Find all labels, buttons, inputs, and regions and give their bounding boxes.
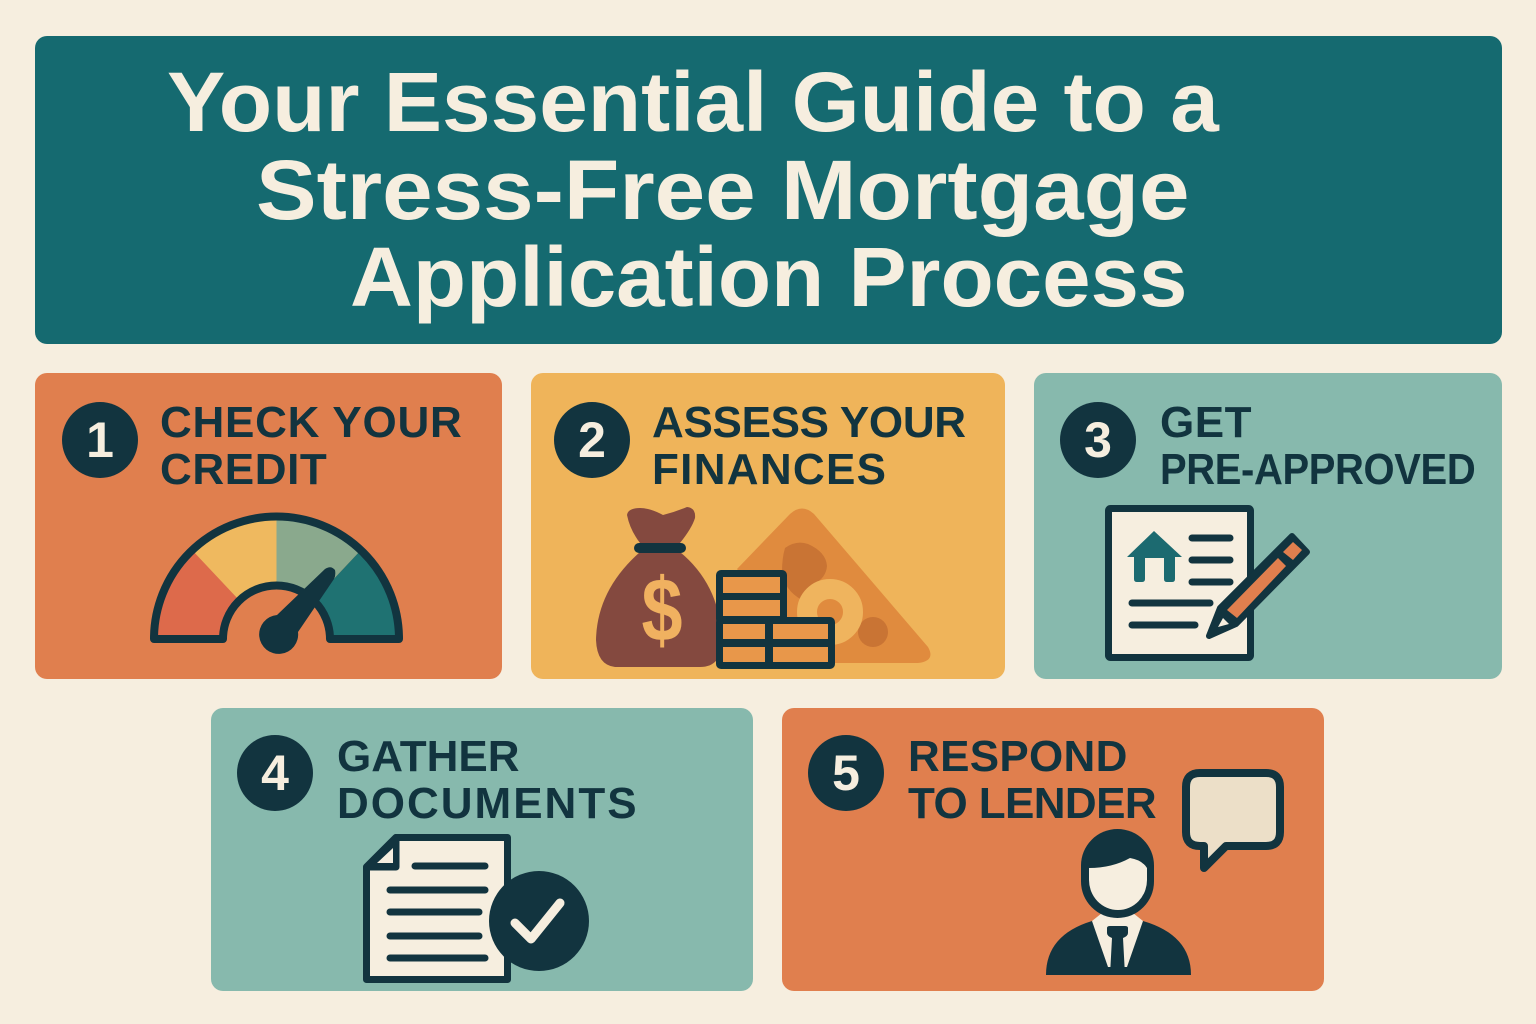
heading: get pre-approved: PRE-APPROVED bbox=[1160, 445, 1475, 494]
heading: assess your finances bbox=[652, 398, 966, 494]
step number 2 bbox=[554, 402, 630, 478]
heading: respond to lender: RESPOND bbox=[908, 732, 1128, 781]
icon: application form and pencil bbox=[1105, 505, 1310, 661]
step number 2: 2 bbox=[578, 412, 606, 468]
heading: respond to lender: TO LENDER bbox=[908, 779, 1156, 828]
heading: check your credit bbox=[160, 398, 463, 494]
panel: step 4 gather documents bbox=[211, 708, 753, 991]
heading: gather documents bbox=[337, 732, 639, 828]
heading: get pre-approved bbox=[1160, 398, 1475, 494]
heading: gather documents: DOCUMENTS bbox=[337, 779, 639, 828]
title banner bbox=[35, 36, 1502, 344]
step number 3 bbox=[1060, 402, 1136, 478]
heading: assess your finances: ASSESS YOUR bbox=[652, 398, 966, 447]
icon: credit score gauge bbox=[150, 512, 403, 654]
icon: lender in suit bbox=[1046, 829, 1191, 975]
step number 5 bbox=[808, 735, 884, 811]
heading: gather documents: GATHER bbox=[337, 732, 520, 781]
heading: check your credit: CHECK YOUR bbox=[160, 398, 463, 447]
heading: respond to lender bbox=[908, 732, 1156, 828]
panel: step 2 assess your finances bbox=[531, 373, 1005, 679]
step number 4 bbox=[237, 735, 313, 811]
title line 1: Your Essential Guide to a bbox=[167, 55, 1219, 149]
title line 2: Stress-Free Mortgage bbox=[256, 143, 1190, 237]
step number 1 bbox=[62, 402, 138, 478]
heading: assess your finances: FINANCES bbox=[652, 445, 887, 494]
heading: get pre-approved: GET bbox=[1160, 398, 1252, 447]
icon: document with check mark bbox=[363, 834, 589, 983]
step number 3: 3 bbox=[1084, 412, 1112, 468]
icon: money bag, coins and triangle: $ bbox=[641, 561, 683, 661]
step number 4: 4 bbox=[261, 745, 289, 801]
panel: step 5 respond to lender bbox=[782, 708, 1324, 991]
panel: step 3 get pre-approved bbox=[1034, 373, 1502, 679]
icon: money bag, coins and triangle bbox=[596, 507, 930, 669]
panel: step 1 check your credit bbox=[35, 373, 502, 679]
step number 5: 5 bbox=[832, 745, 860, 801]
step number 1: 1 bbox=[86, 412, 114, 468]
title line 3: Application Process bbox=[350, 230, 1187, 324]
icon: speech bubble bbox=[1182, 769, 1284, 872]
heading: check your credit: CREDIT bbox=[160, 445, 327, 494]
